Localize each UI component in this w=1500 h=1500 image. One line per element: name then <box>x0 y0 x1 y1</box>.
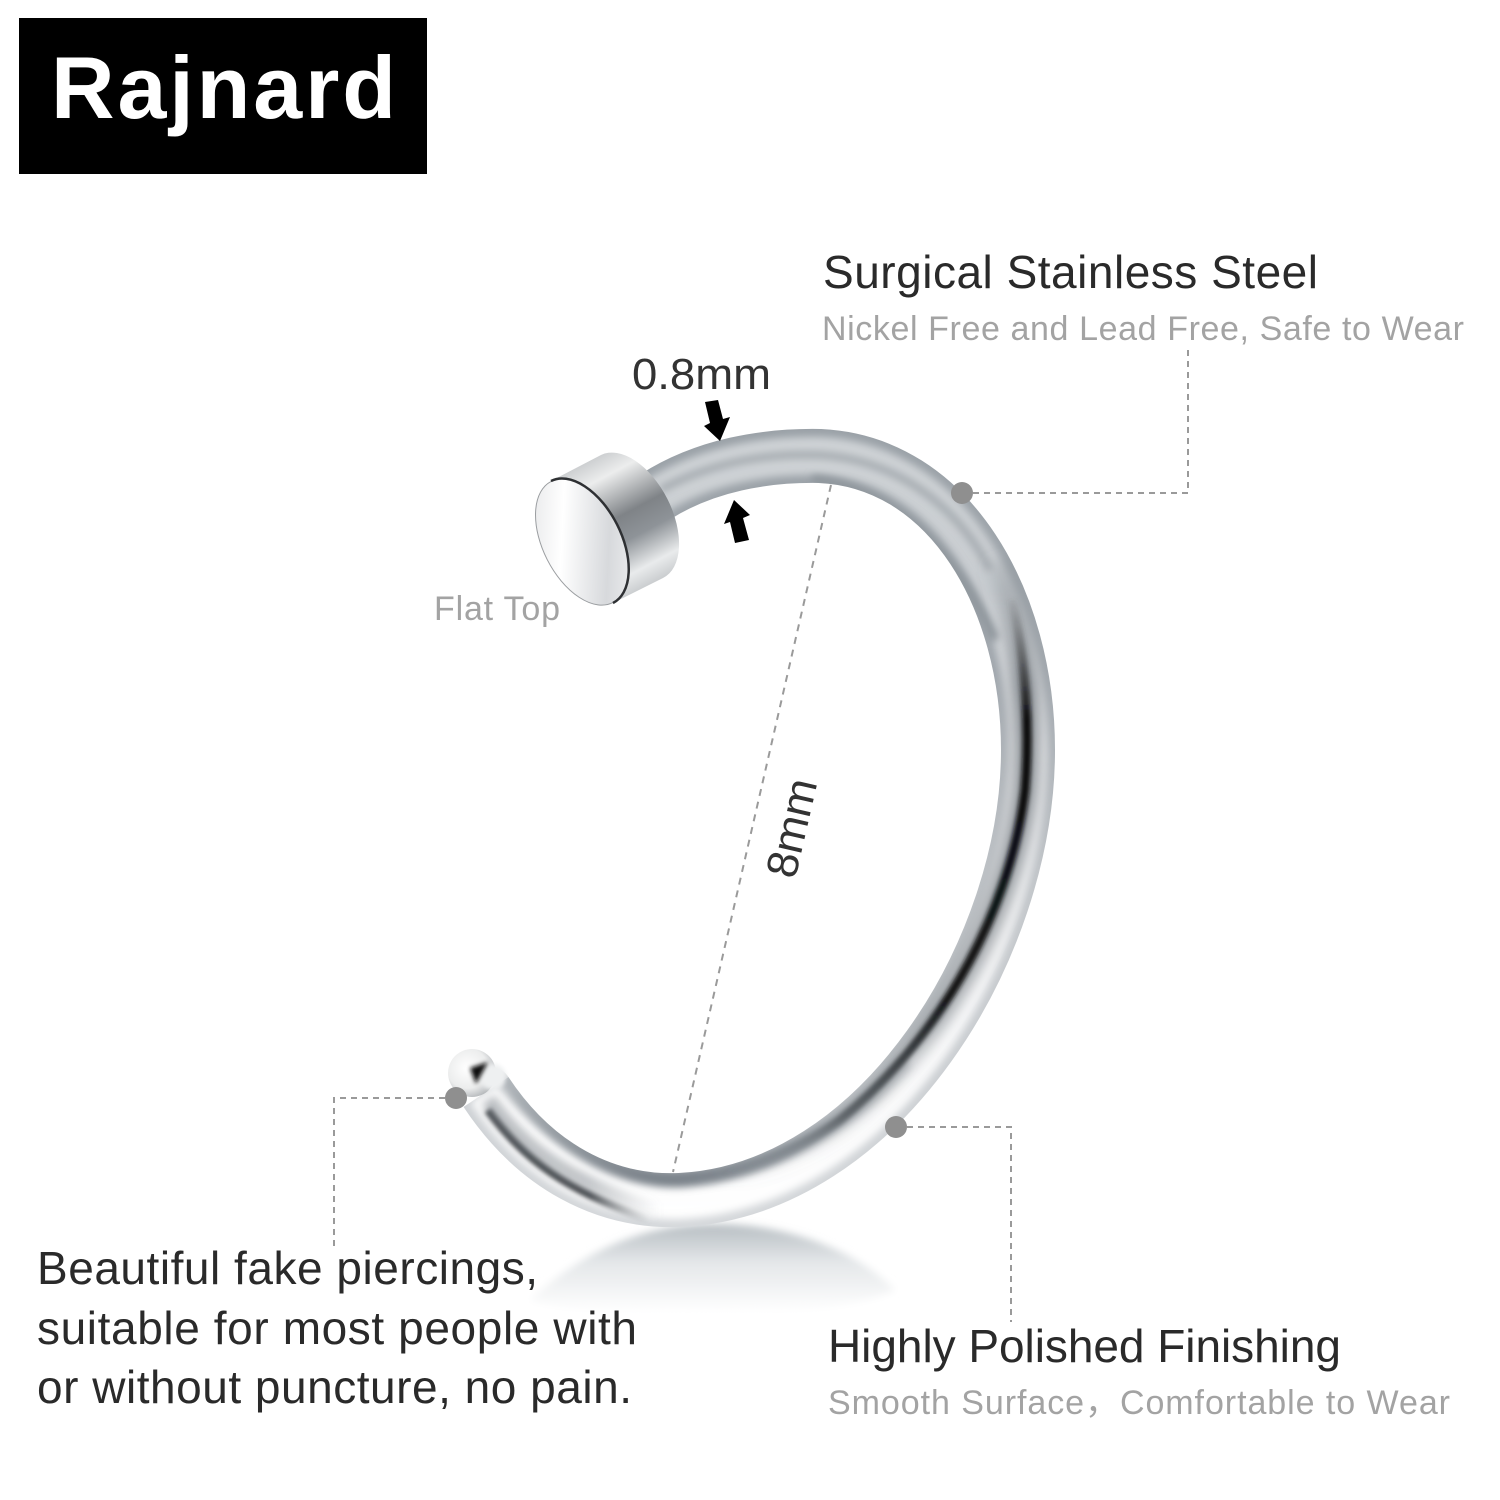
arrow: 0.8mm bottom <box>724 500 750 543</box>
text block: highly polished finishing: Highly Polished Finishing <box>828 1320 1341 1372</box>
flat top head <box>516 453 679 620</box>
ring reflection shadow <box>530 1224 895 1316</box>
label: 8mm: 8mm <box>757 774 827 882</box>
lower left grey halo <box>488 1100 660 1212</box>
upper centre grey stripe <box>660 455 990 570</box>
arrow: 0.8mm top <box>704 400 730 441</box>
dimension line: 8mm diameter <box>673 485 831 1172</box>
logo: Rajnard black box: Rajnard <box>51 38 396 137</box>
text block: surgical stainless steel: Surgical Stainless Steel <box>823 246 1318 298</box>
text block: highly polished finishing: Smooth Surface，Comfortable to Wear <box>828 1384 1450 1422</box>
text block: fake piercings description: Beautiful fake piercings, <box>37 1242 538 1294</box>
text block: highly polished finishing <box>828 1320 1450 1422</box>
text block: fake piercings description <box>37 1242 637 1413</box>
callout dot: polish <box>885 1116 907 1138</box>
text block: fake piercings description: or without puncture, no pain. <box>37 1361 632 1413</box>
callout dot: tip <box>445 1087 467 1109</box>
dark reflection band lower left <box>488 1110 650 1220</box>
dark reflection band right <box>700 600 1027 1186</box>
text block: fake piercings description: suitable for most people with <box>37 1302 637 1354</box>
nose ring tube <box>486 455 1028 1220</box>
text block: surgical stainless steel: Nickel Free and Lead Free, Safe to Wear <box>822 310 1464 348</box>
callout line: polish <box>896 1127 1011 1322</box>
text block: surgical stainless steel <box>822 246 1464 348</box>
dark reflection halo <box>800 561 1048 1158</box>
callout dot: steel <box>951 482 973 504</box>
label: Flat Top: Flat Top <box>434 590 560 628</box>
logo: Rajnard black box <box>19 18 427 174</box>
callout line: tip <box>334 1098 456 1250</box>
ring tip ball <box>448 1049 506 1097</box>
label: 0.8mm: 0.8mm <box>632 350 771 399</box>
callout line: steel <box>962 345 1188 493</box>
inner edge shading <box>500 1060 905 1179</box>
